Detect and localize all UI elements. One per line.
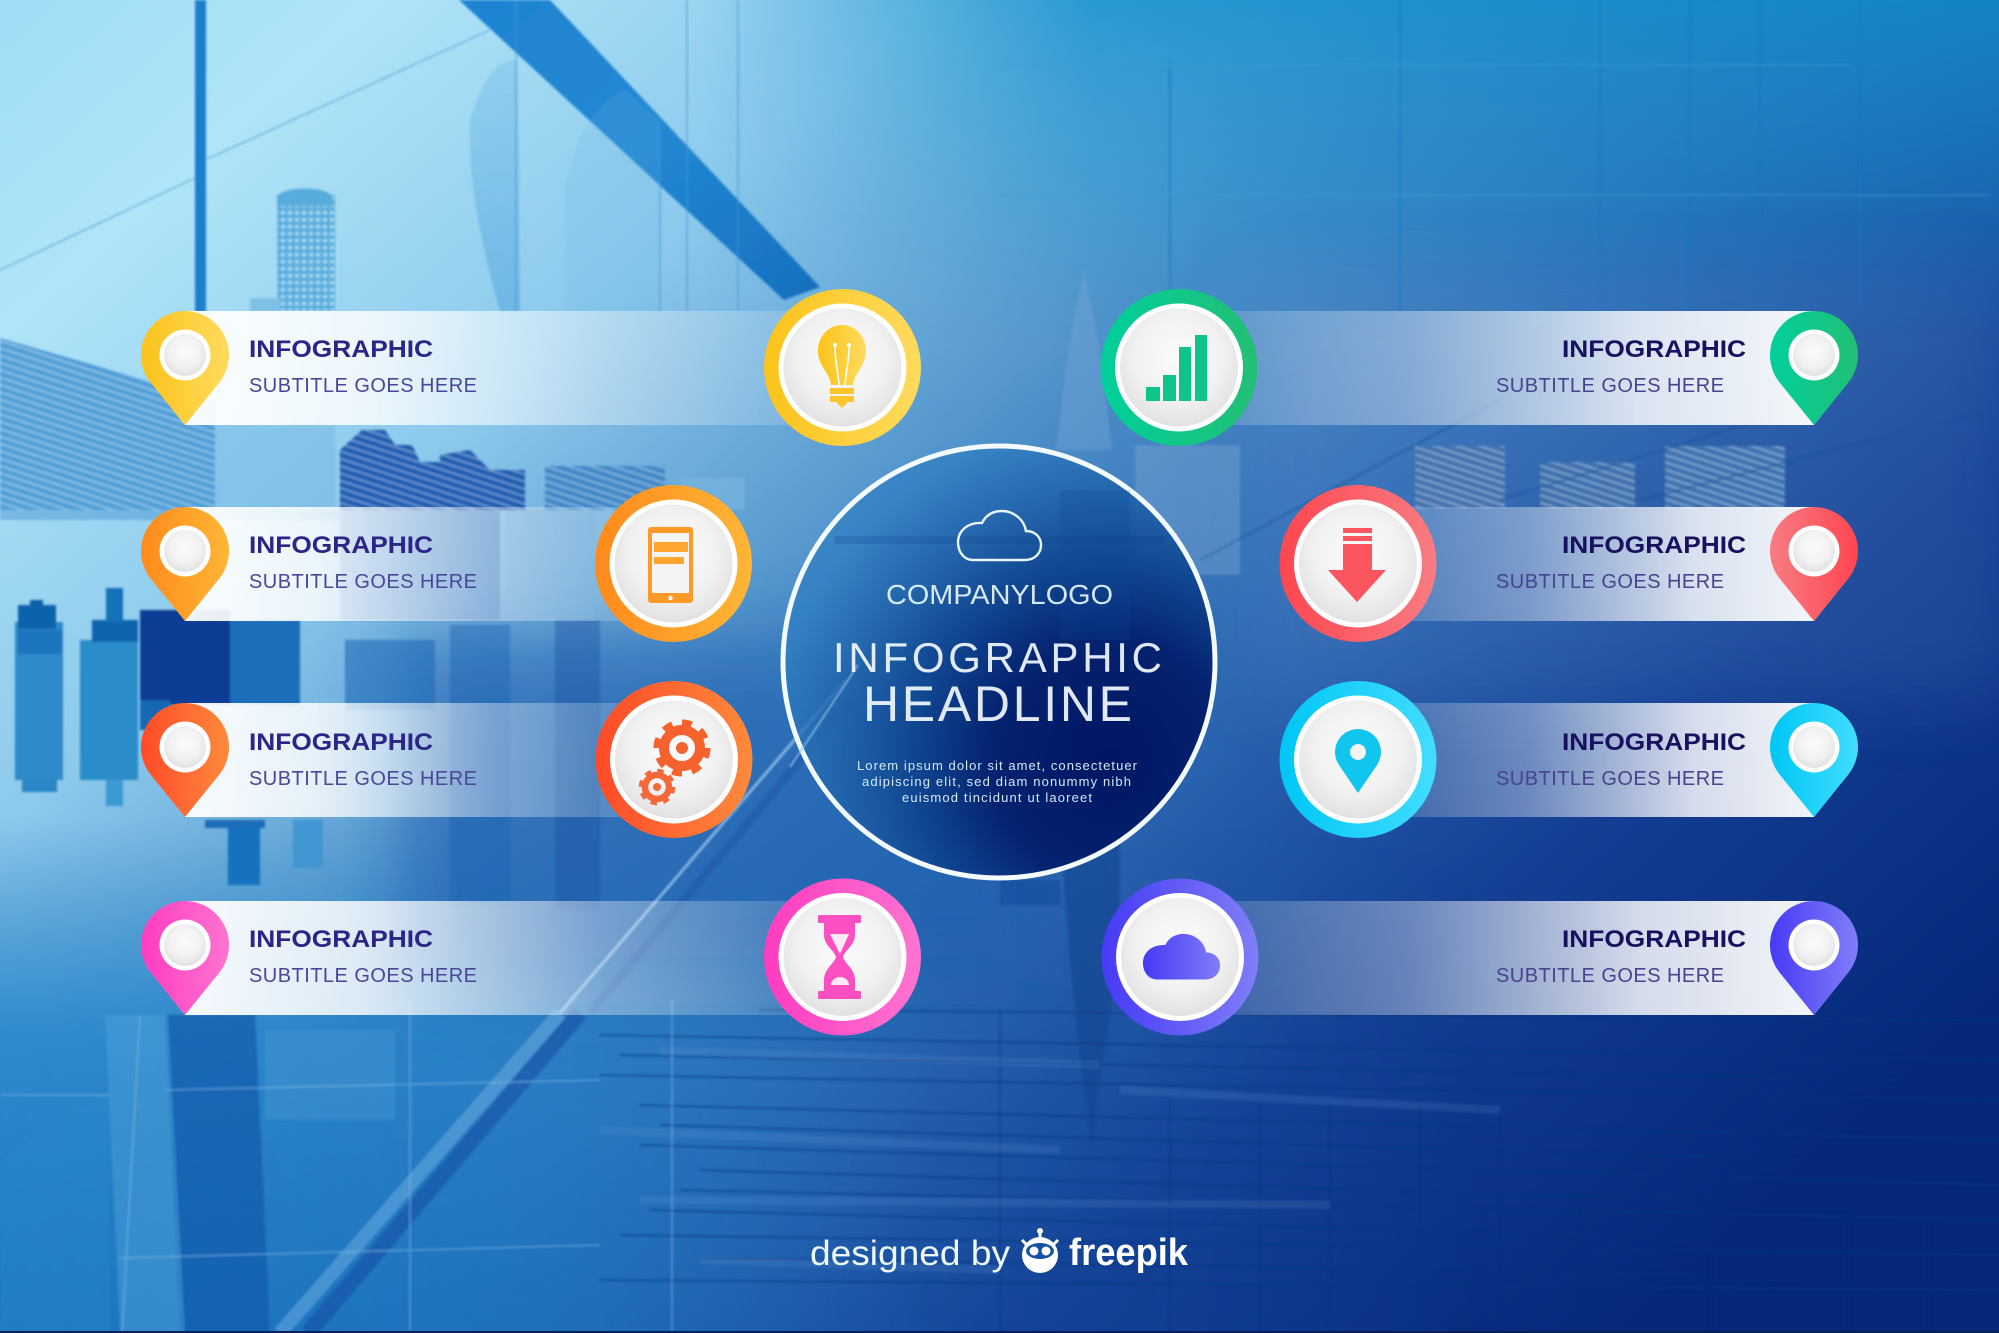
panel: row 3 left, red-orange [141,681,752,838]
subtitle text: SUBTITLE GOES HERE [1496,571,1724,593]
panel: row 3 right, cyan [1280,681,1858,838]
subtitle text: SUBTITLE GOES HERE [249,571,477,593]
label bar [165,901,840,1015]
heading text: INFOGRAPHIC [249,336,433,363]
heading text: INFOGRAPHIC [249,729,433,756]
pin: coral [1770,507,1858,621]
pin: violet [1770,901,1858,1015]
central circle panel [783,446,1215,878]
icon: company logo cloud [958,511,1041,560]
company logo text: COMPANYLOGO [886,579,1113,610]
subtitle text: SUBTITLE GOES HERE [1496,375,1724,397]
icon badge: down arrow [1280,485,1436,642]
body copy: Lorem ipsum dolor sit amet, consectetuer [857,758,1138,773]
body copy: adipiscing elit, sed diam nonummy nibh [862,774,1131,789]
label bar [1360,507,1834,621]
panel: row 1 left, yellow [141,289,921,446]
headline line 1: INFOGRAPHIC [833,634,1162,681]
body copy: euismod tincidunt ut laoreet [902,790,1092,805]
subtitle text: SUBTITLE GOES HERE [1496,768,1724,790]
pin: orange [141,507,229,621]
icon badge: light bulb [764,289,921,446]
label bar [1180,901,1834,1015]
subtitle text: SUBTITLE GOES HERE [249,965,477,987]
pin: green [1770,311,1858,425]
icon badge: gears [596,681,752,838]
heading text: INFOGRAPHIC [1562,532,1746,559]
heading text: INFOGRAPHIC [249,532,433,559]
subtitle text: SUBTITLE GOES HERE [1496,965,1724,987]
designed by text: designed by [810,1234,1011,1273]
pin: cyan [1770,703,1858,817]
icon badge: cloud [1102,878,1258,1036]
pin: red-orange [141,703,229,817]
pin: yellow [141,311,229,425]
footer credit [810,1228,1189,1274]
panel: row 4 right, violet [1102,878,1858,1036]
icon badge: tablet [595,485,752,642]
label bar [1180,311,1834,425]
label bar [165,311,840,425]
panel: row 4 left, pink [141,878,921,1036]
label bar [1360,703,1834,817]
body copy [857,758,1138,805]
heading text: INFOGRAPHIC [1562,926,1746,953]
headline line 2: HEADLINE [863,676,1132,732]
icon: freepik robot [1022,1228,1058,1273]
heading text: INFOGRAPHIC [1562,336,1746,363]
label bar [165,703,672,817]
heading text: INFOGRAPHIC [1562,729,1746,756]
subtitle text: SUBTITLE GOES HERE [249,768,477,790]
freepik wordmark: freepik [1069,1232,1189,1274]
icon badge: bar chart [1100,289,1258,446]
panel: row 1 right, green [1100,289,1858,446]
panel: row 2 right, coral [1280,485,1858,642]
panel: row 2 left, orange [141,485,752,642]
icon badge: location marker [1280,681,1436,838]
label bar [165,507,672,621]
pin: pink [141,901,229,1015]
heading text: INFOGRAPHIC [249,926,433,953]
icon badge: hourglass [764,878,921,1036]
subtitle text: SUBTITLE GOES HERE [249,375,477,397]
